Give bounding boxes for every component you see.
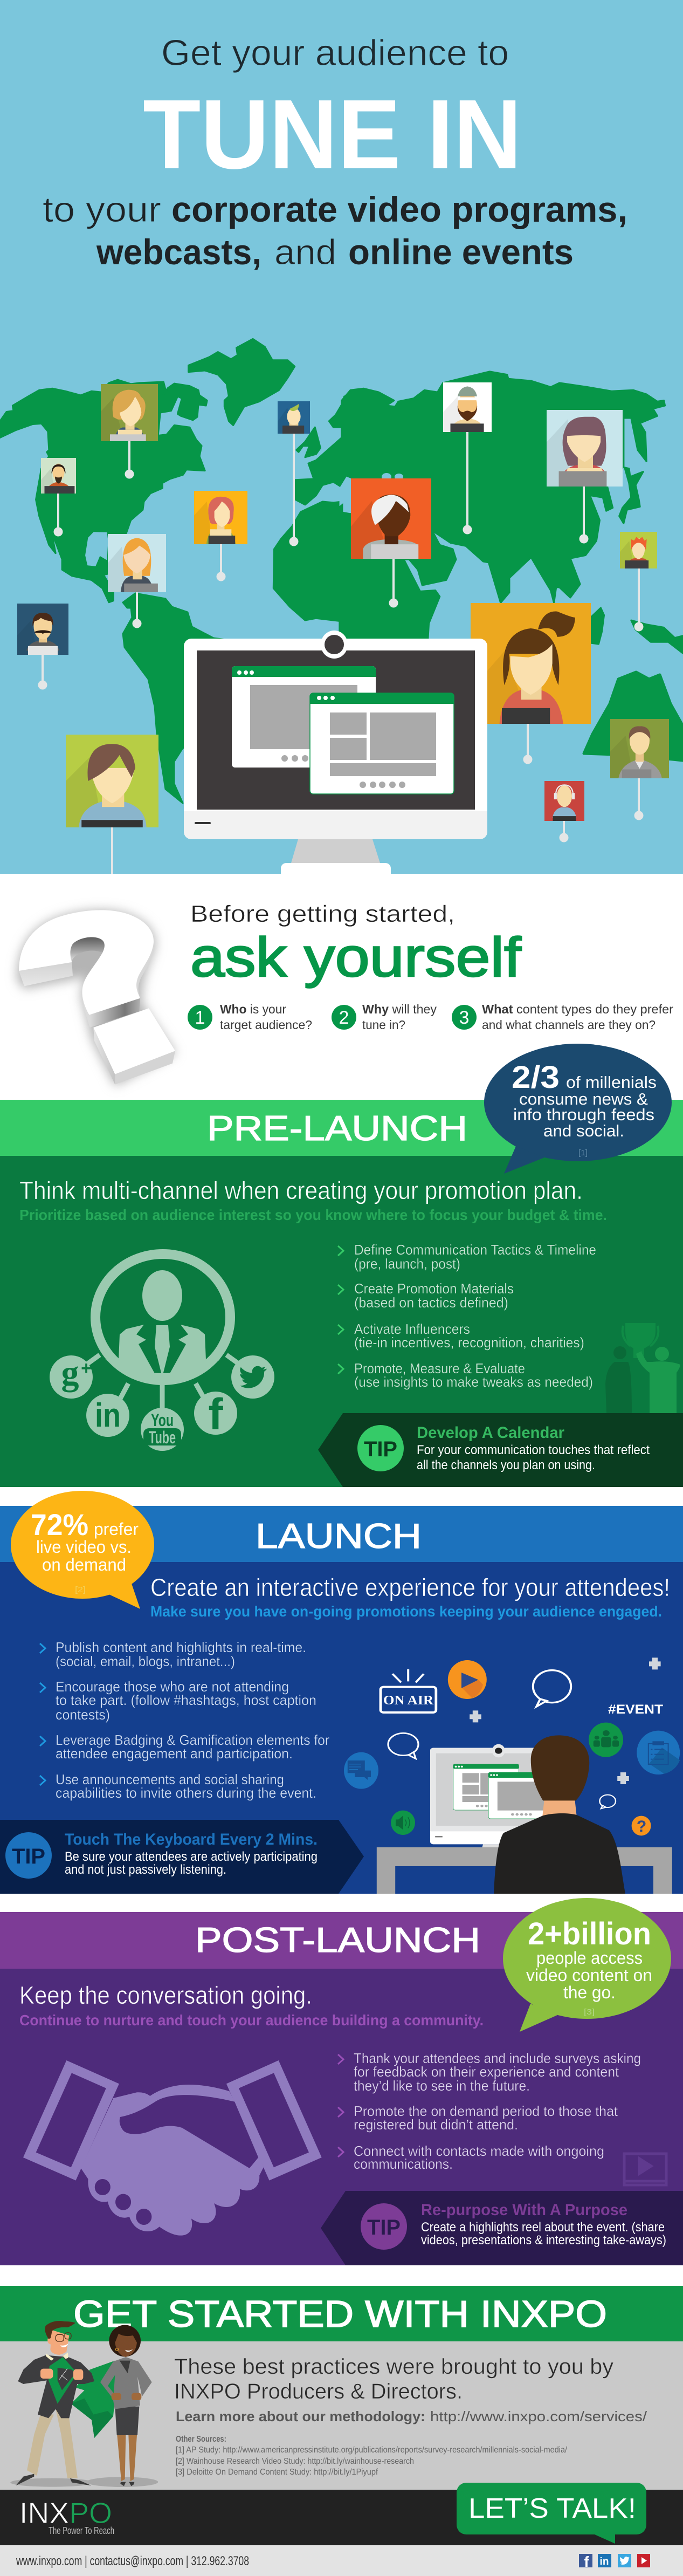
tip: touch the keyboard: [0, 1820, 364, 1894]
callout: 2+billion: the go.: [563, 1983, 616, 2002]
icon: play button: [448, 1660, 487, 1699]
tip: develop a calendar: [318, 1413, 683, 1487]
subtitle: and: [274, 232, 336, 272]
icon: twitter: [231, 1355, 274, 1399]
bullet list: Promote the on demand period to those that: [354, 2103, 618, 2119]
icon: linkedin square: [598, 2554, 611, 2567]
callout: 72% prefer live video: live video vs.: [36, 1537, 132, 1557]
question 3: What content types do they prefer: [482, 1002, 673, 1016]
heading: launch: LAUNCH: [256, 1516, 422, 1556]
tip: develop a calendar: Develop A Calendar: [417, 1424, 564, 1442]
text: sources: [1] AP Study: http://www.americanpressinstitute.org/publications/reports/survey-research/millennials-social-media/: [176, 2445, 568, 2455]
icon: businessman with social network: [50, 1254, 274, 1451]
text: learn more: http://www.inxpo.com/services/: [430, 2408, 647, 2424]
avatar: woman with ponytail on amber: [471, 603, 591, 724]
callout: 2+billion: video content on: [526, 1965, 652, 1985]
panel: get started: [0, 2286, 683, 2490]
icon: small speech bubble: [388, 1733, 418, 1759]
question 1: target audience?: [220, 1018, 312, 1032]
callout: 2+billion: [3]: [584, 2008, 595, 2017]
callout: 2/3 of millenials: of millenials: [566, 1073, 657, 1092]
callout: 2/3 of millenials: consume news &: [519, 1090, 648, 1108]
tip: re-purpose: [321, 2191, 683, 2265]
tip: develop a calendar: For your communication touches that reflect: [417, 1443, 650, 1457]
text: keep the conversation going: Keep the conversation going.: [19, 1981, 312, 2009]
text: think multi-channel: Think multi-channel when creating your promotion plan.: [19, 1176, 583, 1204]
label: #event: #EVENT: [608, 1702, 663, 1717]
question 1: Who is your: [220, 1002, 286, 1016]
avatar: mustached man on navy: [17, 604, 68, 655]
question 3: 3: [459, 1008, 469, 1028]
question 3: [452, 1002, 673, 1032]
question 1: [188, 1002, 312, 1032]
button: let's talk: [457, 2483, 646, 2544]
window: video player: [232, 666, 376, 768]
subtitle: corporate video programs,: [171, 189, 627, 229]
icon: facebook square: f: [584, 2553, 589, 2570]
avatar: redhead on yellow: [194, 491, 247, 544]
callout: 72% prefer live video: on demand: [42, 1555, 126, 1574]
question 2: 2: [339, 1008, 349, 1028]
text: sources: Other Sources:: [176, 2435, 226, 2444]
bullet list: communications.: [354, 2156, 453, 2172]
bullet list: Create Promotion Materials: [354, 1280, 514, 1297]
bullet list: registered but didn’t attend.: [354, 2116, 518, 2133]
subtitle: webcasts,: [96, 232, 261, 272]
text: learn more: Learn more about our methodology:: [176, 2408, 425, 2424]
bullet list: (tie-in incentives, recognition, charities): [354, 1334, 584, 1351]
callout: 2/3 of millenials: info through feeds: [513, 1105, 654, 1124]
tip: touch the keyboard: TIP: [12, 1845, 45, 1868]
icon: plus: [617, 1772, 629, 1784]
icon: youtube: Tube: [149, 1428, 176, 1447]
panel: launch: [0, 1491, 683, 1894]
text: best practices: These best practices were brought to you by: [174, 2355, 613, 2379]
right strip: [135, 944, 154, 1003]
tip: touch the keyboard: Touch The Keyboard Every 2 Mins.: [65, 1831, 318, 1848]
stem wall: [89, 998, 140, 1027]
heading: before getting started: Before getting started,: [190, 901, 455, 927]
callout: 2+billion: [503, 1898, 671, 2032]
avatar: redhead with glasses on lime: [620, 532, 657, 568]
bullet list: they’d like to see in the future.: [354, 2078, 530, 2094]
bullet list: Publish content and highlights in real-time.: [56, 1639, 306, 1655]
avatar: blonde on pale blue: [108, 534, 166, 592]
top faces: [19, 910, 154, 1015]
avatar: man on lime: [66, 735, 158, 827]
panel: footer: [0, 2545, 683, 2576]
world map: [0, 339, 683, 803]
question 2: [332, 1002, 437, 1032]
logo: inxpo: The Power To Reach: [49, 2525, 114, 2536]
bullet list: attendee engagement and participation.: [56, 1745, 293, 1762]
callout: 2/3 of millenials: and social.: [543, 1121, 624, 1140]
tip: develop a calendar: TIP: [364, 1437, 397, 1461]
bullet list: (social, email, blogs, intranet...): [56, 1653, 235, 1669]
icon: youtube square: [637, 2554, 650, 2567]
illustration: attendee at computer with engagement icons: [344, 1657, 680, 1894]
panel: hero world map: [0, 0, 683, 879]
bullet list: to take part. (follow #hashtags, host caption: [56, 1692, 316, 1708]
icon: google plus: +: [81, 1358, 92, 1379]
callout: 72% prefer live video: 72%: [31, 1508, 88, 1542]
hook inner wall: [70, 937, 105, 962]
callout: 72% prefer live video: prefer: [94, 1519, 139, 1539]
icon: group circle: [589, 1723, 623, 1757]
bullet list: Define Communication Tactics & Timeline: [354, 1242, 596, 1258]
bullet list: Leverage Badging & Gamification elements for: [56, 1732, 329, 1748]
bullet list: Promote, Measure & Evaluate: [354, 1360, 525, 1376]
bullet list: (based on tactics defined): [354, 1294, 508, 1311]
dot walls: [93, 1027, 115, 1085]
question 2: Why will they: [362, 1002, 437, 1016]
callout: 72% prefer live video: [11, 1491, 154, 1609]
icon: google plus: g: [61, 1353, 79, 1393]
avatar: blonde woman on olive: [101, 384, 158, 441]
panel: pre-launch: [0, 1044, 683, 1487]
bullet list: capabilities to invite others during the event.: [56, 1785, 316, 1801]
tip: re-purpose: Re-purpose With A Purpose: [421, 2201, 627, 2219]
icon: google plus: [50, 1353, 93, 1399]
bullet list: Use announcements and social sharing: [56, 1771, 284, 1787]
subtitle: [43, 189, 627, 272]
icon: plus: [470, 1710, 481, 1722]
avatar: bearded man small: [41, 458, 76, 494]
bullet list: Encourage those who are not attending: [56, 1678, 289, 1695]
icon: video tablet: [624, 2154, 666, 2185]
title: tune in: TUNE IN: [143, 79, 522, 189]
subtitle: online events: [348, 232, 574, 272]
icon: trophy winners: [605, 1323, 680, 1413]
avatar: woman on pale blue: [547, 410, 623, 487]
avatar: woman with white hair on orange: [351, 478, 431, 559]
bullet list: [338, 2050, 641, 2172]
icon: youtube: [141, 1408, 184, 1451]
text: best practices: [174, 2355, 613, 2403]
icon: linkedin: [86, 1394, 129, 1437]
text: best practices: INXPO Producers & Directors.: [174, 2380, 463, 2403]
heading: post-launch: POST-LAUNCH: [195, 1920, 480, 1960]
avatar: small on dark blue: [278, 401, 310, 434]
bullet list: contests): [56, 1707, 110, 1723]
text: sources: [3] Deloitte On Demand Content Study: http://bit.ly/1Piyupf: [176, 2468, 378, 2477]
bullet list: Thank your attendees and include surveys asking: [354, 2050, 641, 2066]
button: let's talk: LET’S TALK!: [468, 2493, 636, 2524]
icon: facebook square: [579, 2553, 592, 2570]
cape: [71, 2361, 139, 2438]
question 1: 1: [195, 1008, 205, 1028]
tip: touch the keyboard: and not just passively listening.: [65, 1862, 226, 1877]
icon: facebook: f: [208, 1390, 223, 1439]
pins: [38, 432, 644, 874]
icon: linkedin: in: [95, 1397, 121, 1434]
text: learn more: [176, 2408, 647, 2424]
person seen from behind: [494, 1735, 625, 1894]
bullet list: (use insights to make tweaks as needed): [354, 1374, 593, 1390]
panel: ask yourself: [0, 874, 683, 1100]
icon: 3D question mark: [17, 910, 176, 1086]
icon: youtube: You: [151, 1410, 174, 1430]
small monitor: [430, 1744, 551, 1847]
icon: tiny speech bubble: [599, 1795, 616, 1808]
callout: 2+billion: people access: [536, 1948, 643, 1968]
callout: 72% prefer live video: [2]: [75, 1585, 86, 1594]
tip: re-purpose: Create a highlights reel about the event. (share: [421, 2220, 665, 2235]
avatar: man with glasses on olive: [610, 719, 669, 778]
bullet list: [338, 1242, 596, 1390]
text: sources: [2] Wainhouse Research Video Study: http://bit.ly/wainhouse-research: [176, 2457, 414, 2466]
question 3: and what channels are they on?: [482, 1018, 656, 1032]
monitor: [184, 631, 487, 879]
callout: 2+billion: 2+billion: [528, 1916, 651, 1951]
heading: pre-launch: PRE-LAUNCH: [207, 1108, 467, 1148]
glyph: question mark: ?: [637, 1818, 646, 1835]
avatar: man with headphones on red: [544, 781, 584, 821]
label: on air: ON AIR: [383, 1694, 434, 1708]
bullet list: [40, 1639, 329, 1801]
callout: 2/3 of millenials: [484, 1044, 672, 1174]
text: contact details: www.inxpo.com | contactus@inxpo.com | 312.962.3708: [16, 2554, 249, 2568]
bullet list: for feedback on their experience and content: [354, 2064, 619, 2080]
title: get your audience to: Get your audience to: [161, 32, 509, 73]
heading: get started with inxpo: GET STARTED WITH INXPO: [73, 2293, 607, 2335]
icon: linkedin square: in: [600, 2556, 609, 2567]
icon: speech bubble large: [533, 1670, 571, 1707]
text: continue to nurture: Continue to nurture and touch your audience building a community.: [19, 2012, 484, 2029]
question 2: tune in?: [362, 1018, 405, 1032]
panel: post-launch: [0, 1898, 683, 2265]
text: sources: [176, 2435, 568, 2477]
icon: on air sign: [381, 1669, 436, 1712]
left end side wall: [19, 962, 73, 986]
icon: handshake: [23, 2060, 322, 2236]
bullet list: Connect with contacts made with ongoing: [354, 2143, 604, 2159]
heading: ask yourself: ask yourself: [190, 926, 521, 988]
tip: touch the keyboard: Be sure your attendees are actively participating: [65, 1849, 318, 1864]
icon: chat circle: [344, 1752, 378, 1789]
callout: 2/3 of millenials: 2/3: [512, 1060, 560, 1095]
tip: re-purpose: TIP: [367, 2216, 401, 2239]
icon: plus: [649, 1657, 661, 1669]
callout: 2/3 of millenials: [1]: [578, 1148, 588, 1157]
woman: [100, 2325, 152, 2486]
bullet list: (pre, launch, post): [354, 1256, 460, 1272]
avatar: bearded man with hat: [443, 382, 492, 432]
text: make sure: Make sure you have on-going promotions keeping your audience engaged.: [150, 1603, 662, 1620]
icon: question circle: [632, 1816, 651, 1835]
man: [16, 2321, 94, 2485]
desk: [377, 1847, 672, 1894]
icon: clipboard circle: [637, 1731, 680, 1775]
text: prioritize: Prioritize based on audience interest so you know where to focus your budget & time.: [19, 1207, 607, 1223]
subtitle: to your: [43, 189, 161, 229]
illustration: inxpo superhero characters: [10, 2321, 158, 2487]
bullet list: Activate Influencers: [354, 1321, 470, 1337]
icon: twitter square: [618, 2554, 631, 2567]
panel: contact bar: [0, 2483, 683, 2545]
logo: inxpo: INXPO: [19, 2496, 112, 2530]
icon: facebook: [194, 1390, 237, 1439]
tip: develop a calendar: all the channels you plan on using.: [417, 1458, 595, 1472]
icon: speaker circle: [391, 1811, 415, 1835]
window: layout grid: [310, 693, 454, 794]
